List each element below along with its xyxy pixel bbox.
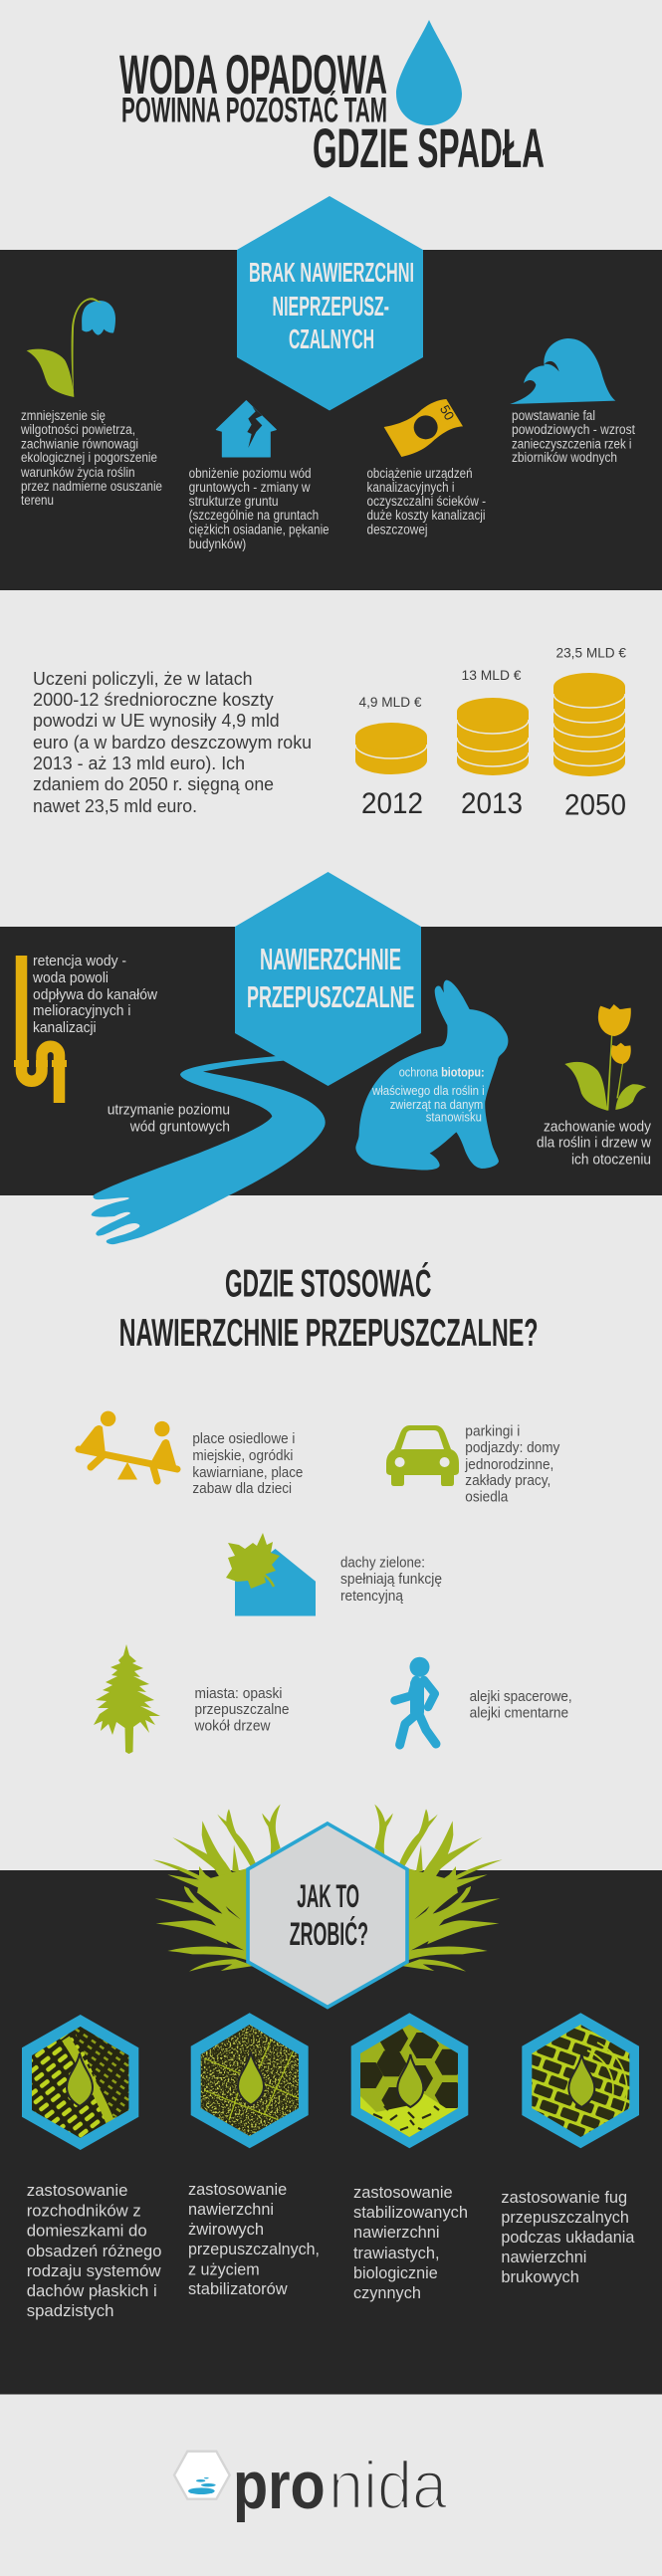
text: obciążenie urządzeń: deszczowej — [366, 522, 428, 537]
text: miasta: przepuszczalne — [195, 1702, 289, 1718]
title block — [119, 20, 545, 179]
text: parkingi i podjazdy: zakłady pracy, — [465, 1473, 551, 1489]
icon: rabbit — [355, 980, 508, 1171]
heading — [119, 1261, 539, 1355]
text: parkingi i podjazdy: osiedla — [465, 1490, 509, 1506]
text: obniżenie poziomu wód: budynków) — [189, 537, 246, 551]
text: obciążenie urządzeń: kanalizacyjnych i — [366, 480, 454, 495]
text: dachy zielone: dachy zielone: — [340, 1555, 425, 1571]
text: retencja wody: odpływa do kanałów — [33, 986, 157, 1003]
text: obciążenie urządzeń: duże koszty kanalizacji — [366, 508, 486, 523]
text: retencja wody: melioracyjnych i — [33, 1002, 130, 1019]
text: fugi przepuszczalne: przepuszczalnych — [501, 2208, 629, 2227]
icon: river — [92, 1056, 326, 1244]
text: miasta: wokół drzew — [194, 1719, 271, 1735]
text: nawierzchnie trawiaste: stabilizowanych — [353, 2203, 468, 2222]
text: powstawanie fal — [512, 408, 635, 465]
text: rozchodniki — [27, 2181, 161, 2320]
icon: walking person — [394, 1657, 436, 1745]
text: fugi przepuszczalne: podczas układania — [501, 2228, 635, 2247]
text: retencja wody — [32, 953, 157, 1036]
photo hexagon: gravel — [191, 2013, 309, 2148]
text: miasta: miasta: opaski — [195, 1686, 283, 1702]
text: nawierzchnie żwirowe — [188, 2180, 320, 2298]
icon: drain pipe — [14, 956, 67, 1103]
text: ochrona biotopu — [371, 1066, 485, 1125]
coin stack 2013: 2013 — [461, 787, 523, 820]
text: rozchodniki: dachów płaskich i — [27, 2281, 157, 2300]
text: koszty powodzi: 2013 - aż 13 mld euro). Ich — [33, 753, 245, 773]
text: place osiedlowe: place osiedlowe i — [192, 1431, 295, 1447]
text: obniżenie poziomu wód: (szczególnie na gruntach — [189, 508, 319, 523]
icon: banknote: 50 — [437, 402, 457, 423]
coin stack 2012 — [355, 694, 427, 820]
coin stack 2013 — [457, 667, 529, 820]
heading: GDZIE STOSOWAĆ — [225, 1261, 431, 1305]
icon: tulips — [564, 1004, 646, 1111]
text: zmniejszenie wilgotności — [20, 408, 162, 508]
logo hexagon — [174, 2452, 230, 2499]
text: nawierzchnie żwirowe: przepuszczalnych, — [188, 2240, 320, 2258]
text: powstawanie fal: zanieczyszczenia rzek i — [512, 436, 631, 452]
text: koszty powodzi: zdaniem do 2050 r. sięgną one — [33, 774, 274, 794]
text: rozchodniki: zastosowanie — [27, 2181, 128, 2200]
panel: jak to zrobić — [0, 1805, 662, 2395]
coin stack 2050: 2050 — [564, 788, 626, 822]
text: nawierzchnie trawiaste: czynnych — [353, 2283, 421, 2302]
text: dachy zielone — [340, 1555, 442, 1605]
text: place osiedlowe: miejskie, ogródki — [192, 1448, 293, 1464]
text: nawierzchnie żwirowe: zastosowanie — [188, 2180, 287, 2199]
icon: green roof house — [226, 1533, 316, 1616]
icon: flood wave — [510, 338, 615, 404]
text: utrzymanie poziomu wód: utrzymanie poziomu — [108, 1101, 230, 1118]
panel: gdzie stosować — [78, 1261, 572, 1754]
text: obciążenie urządzeń: oczyszczalni ścieków - — [366, 494, 486, 509]
logo: pronida — [174, 2448, 447, 2523]
text: koszty powodzi: Uczeni policzyli, że w latach — [33, 669, 253, 689]
photo hexagon: paving — [522, 2013, 639, 2148]
text: zmniejszenie wilgotności: wilgotności powietrza, — [20, 422, 135, 437]
hexagon heading: PRZEPUSZCZALNE — [247, 979, 414, 1014]
text: parkingi i podjazdy: parkingi i — [465, 1423, 520, 1439]
panel: brak nawierzchni nieprzepuszczalnych — [0, 196, 662, 590]
text: zachowanie wody — [537, 1119, 651, 1168]
text: retencja wody: retencja wody - — [33, 953, 126, 969]
text: place osiedlowe: kawiarniane, place — [192, 1465, 303, 1481]
text: fugi przepuszczalne: zastosowanie fug — [501, 2188, 627, 2207]
panel: koszty powodzi — [33, 645, 626, 822]
icon: water drop — [396, 20, 462, 125]
text: obniżenie poziomu wód: ciężkich osiadanie, pękanie — [189, 522, 330, 537]
text: nawierzchnie trawiaste — [353, 2183, 468, 2302]
text: place osiedlowe: zabaw dla dzieci — [192, 1481, 292, 1497]
hexagon heading: NAWIERZCHNIE — [260, 942, 401, 976]
text: nawierzchnie żwirowe: żwirowych — [188, 2220, 264, 2239]
text: fugi przepuszczalne: nawierzchni — [501, 2248, 586, 2266]
text: zmniejszenie wilgotności: warunków życia roślin — [20, 465, 135, 480]
text: alejki: alejki spacerowe, — [470, 1689, 572, 1705]
coin stack 2050 — [553, 645, 626, 822]
text: powstawanie fal: powodziowych - wzrost — [512, 422, 635, 437]
text: fugi przepuszczalne: brukowych — [501, 2267, 579, 2286]
text: rozchodniki: rozchodników z — [27, 2202, 141, 2221]
text: nawierzchnie żwirowe: nawierzchni — [188, 2200, 274, 2219]
text: retencja wody: woda powoli — [32, 969, 109, 986]
text: fugi przepuszczalne — [501, 2188, 635, 2286]
text: utrzymanie poziomu wód: wód gruntowych — [129, 1119, 230, 1136]
text: nawierzchnie trawiaste: zastosowanie — [353, 2183, 453, 2202]
text: ochrona biotopu: stanowisku — [426, 1111, 482, 1125]
icon: car — [386, 1425, 459, 1486]
text: obniżenie poziomu wód — [189, 466, 330, 551]
text: rozchodniki: domieszkami do — [27, 2222, 147, 2241]
text: powstawanie fal: zbiorników wodnych — [512, 450, 617, 465]
hexagon heading: NIEPRZEPUSZ- — [273, 291, 389, 322]
text: parkingi i podjazdy: podjazdy: domy — [465, 1440, 560, 1456]
panel: nawierzchnie przepuszczalne — [0, 872, 662, 1244]
coin stack 2013: 13 MLD € — [462, 667, 522, 683]
text: ochrona biotopu: właściwego dla roślin i — [371, 1084, 485, 1098]
title line 1: WODA OPADOWA — [119, 44, 387, 106]
logo wordmark — [233, 2448, 447, 2523]
hexagon heading — [237, 196, 423, 410]
text: zmniejszenie wilgotności: zachwianie równowagi — [21, 436, 138, 452]
text: miasta — [194, 1686, 289, 1735]
icon: spruce tree — [94, 1644, 160, 1754]
text: nawierzchnie trawiaste: nawierzchni — [353, 2223, 440, 2242]
text: zmniejszenie wilgotności: zmniejszenie się — [21, 408, 106, 423]
photo hexagon: roof — [22, 2015, 138, 2150]
text: ochrona biotopu: ochrona biotopu: — [399, 1066, 485, 1080]
coin stack 2050: 23,5 MLD € — [555, 645, 626, 661]
text: zachowanie wody: ich otoczeniu — [571, 1151, 651, 1168]
photo hexagon: grass grid — [351, 2013, 468, 2148]
hexagon heading: CZALNYCH — [289, 323, 374, 354]
logo wordmark: pro — [233, 2448, 326, 2523]
hexagon heading — [235, 872, 421, 1086]
icon: banknote — [384, 399, 463, 457]
text: nawierzchnie trawiaste: trawiastych, — [353, 2244, 440, 2262]
hexagon heading: BRAK NAWIERZCHNI — [249, 257, 414, 288]
text: nawierzchnie żwirowe: stabilizatorów — [188, 2279, 288, 2298]
text: koszty powodzi: euro (a w bardzo deszczowym roku — [33, 733, 312, 752]
text: nawierzchnie trawiaste: biologicznie — [353, 2263, 438, 2282]
text: dachy zielone: spełniają funkcję — [340, 1572, 442, 1588]
text: obciążenie urządzeń: obciążenie urządzeń — [366, 466, 472, 481]
text: koszty powodzi: nawet 23,5 mld euro. — [33, 796, 197, 816]
icon: wilting flower — [27, 298, 115, 397]
text: zmniejszenie wilgotności: przez nadmierne osuszanie — [21, 479, 162, 494]
coin stack 2012: 4,9 MLD € — [358, 694, 422, 710]
text: koszty powodzi — [33, 669, 312, 816]
text: parkingi i podjazdy: jednorodzinne, — [464, 1457, 553, 1473]
hexagon heading: JAK TO — [297, 1878, 359, 1914]
text: zachowanie wody: dla roślin i drzew w — [537, 1135, 651, 1152]
text: parkingi i podjazdy — [464, 1423, 560, 1506]
hexagon heading: ZROBIĆ? — [290, 1916, 368, 1952]
text: rozchodniki: spadzistych — [27, 2301, 114, 2320]
text: place osiedlowe — [192, 1431, 303, 1497]
text: ochrona biotopu: zwierząt na danym — [390, 1098, 483, 1112]
text: retencja wody: kanalizacji — [33, 1019, 97, 1036]
text: dachy zielone: retencyjną — [340, 1589, 404, 1605]
text: rozchodniki: rodzaju systemów — [27, 2261, 161, 2280]
text: obniżenie poziomu wód: obniżenie poziomu wód — [189, 466, 312, 481]
text: zmniejszenie wilgotności: ekologicznej i pogorszenie — [21, 450, 157, 465]
text: koszty powodzi: 2000-12 średnioroczne koszty — [33, 690, 274, 710]
text: rozchodniki: obsadzeń różnego — [27, 2242, 161, 2260]
text: nawierzchnie żwirowe: z użyciem — [188, 2259, 260, 2278]
text: obniżenie poziomu wód: gruntowych - zmiany w — [189, 480, 311, 495]
icon: seesaw — [78, 1411, 177, 1481]
text: zmniejszenie wilgotności: terenu — [21, 493, 54, 508]
logo wordmark: nida — [329, 2448, 447, 2523]
text: alejki: alejki cmentarne — [470, 1706, 568, 1722]
coin stack 2012: 2012 — [361, 787, 423, 820]
text: obniżenie poziomu wód: strukturze gruntu — [189, 494, 279, 509]
hexagon heading — [248, 1824, 407, 2007]
icon: cracked house — [216, 401, 276, 457]
text: powstawanie fal: powstawanie fal — [512, 408, 595, 423]
text: utrzymanie poziomu wód — [108, 1101, 230, 1136]
text: zachowanie wody: zachowanie wody — [544, 1119, 651, 1136]
text: obciążenie urządzeń — [366, 466, 486, 537]
title line 2: POWINNA POZOSTAĆ TAM — [121, 90, 387, 129]
icon: grass — [152, 1805, 503, 1972]
text: alejki — [470, 1689, 572, 1722]
text: koszty powodzi: powodzi w UE wynosiły 4,9 mld — [33, 711, 280, 731]
